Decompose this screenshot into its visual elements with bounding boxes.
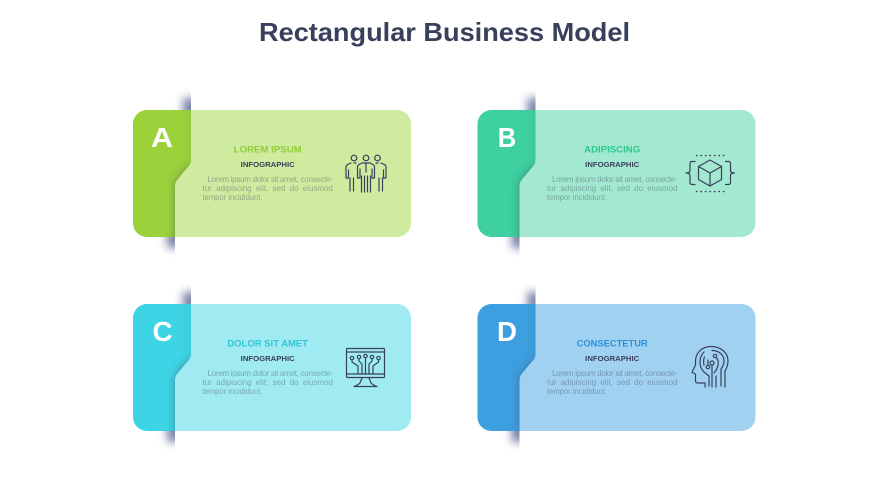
top shadow [521, 286, 536, 304]
description: tur adipiscing elit, sed do eiusmod [202, 378, 333, 387]
top shadow [176, 92, 191, 110]
subheading: INFOGRAPHIC [585, 354, 639, 363]
tab inner shadow [170, 352, 191, 431]
colored tab [133, 110, 191, 237]
description: tempor incididunt. [202, 193, 262, 202]
description [202, 175, 333, 202]
card background [478, 110, 756, 237]
bottom shadow [160, 431, 175, 448]
top shadow [176, 286, 191, 304]
colored tab [133, 304, 191, 431]
heading: ADIPISCING [584, 144, 640, 155]
top shadow [521, 92, 536, 110]
description: Lorem ipsum dolor sit amet, consecte- [208, 369, 333, 378]
panel: D [478, 289, 756, 444]
panel: B [478, 95, 756, 250]
tab inner shadow [514, 353, 536, 431]
description: Lorem ipsum dolor sit amet, consecte- [552, 175, 678, 184]
tab inner shadow [514, 158, 536, 237]
letter: D [497, 316, 517, 347]
description: tur adipiscing elit, sed do eiusmod [202, 184, 333, 193]
letter: B [498, 122, 516, 153]
bottom shadow [505, 237, 520, 254]
description: tempor incididunt. [547, 387, 607, 396]
heading: DOLOR SIT AMET [227, 338, 308, 349]
panel: A [133, 95, 411, 250]
colored tab [478, 304, 536, 431]
icon: people [346, 155, 386, 192]
subheading: INFOGRAPHIC [241, 160, 295, 169]
card background [133, 110, 411, 237]
description [547, 175, 678, 202]
tab inner shadow [170, 158, 191, 237]
card background [133, 304, 411, 431]
letter: A [151, 122, 173, 153]
heading: CONSECTETUR [577, 338, 648, 349]
colored tab [478, 110, 536, 237]
description: tempor incididunt. [547, 193, 607, 202]
description: tempor incididunt. [202, 387, 262, 396]
description: Lorem ipsum dolor sit amet, consecte- [552, 369, 678, 378]
heading: LOREM IPSUM [234, 144, 302, 155]
icon: head with circuit [692, 346, 728, 387]
subheading: INFOGRAPHIC [585, 160, 639, 169]
icon: cube with braces [686, 156, 734, 192]
bottom shadow [160, 237, 175, 254]
letter: C [152, 316, 172, 347]
subheading: INFOGRAPHIC [241, 354, 295, 363]
description: tur adipiscing elit, sed do eiusmod [547, 184, 678, 193]
title: Rectangular Business Model [259, 17, 630, 47]
panel: C [133, 289, 411, 444]
description: Lorem ipsum dolor sit amet, consecte- [208, 175, 333, 184]
icon: circuit monitor [346, 348, 384, 386]
description [547, 369, 678, 396]
bottom shadow [505, 431, 520, 448]
card background [478, 304, 756, 431]
description: tur adipiscing elit, sed do eiusmod [547, 378, 678, 387]
description [202, 369, 333, 396]
